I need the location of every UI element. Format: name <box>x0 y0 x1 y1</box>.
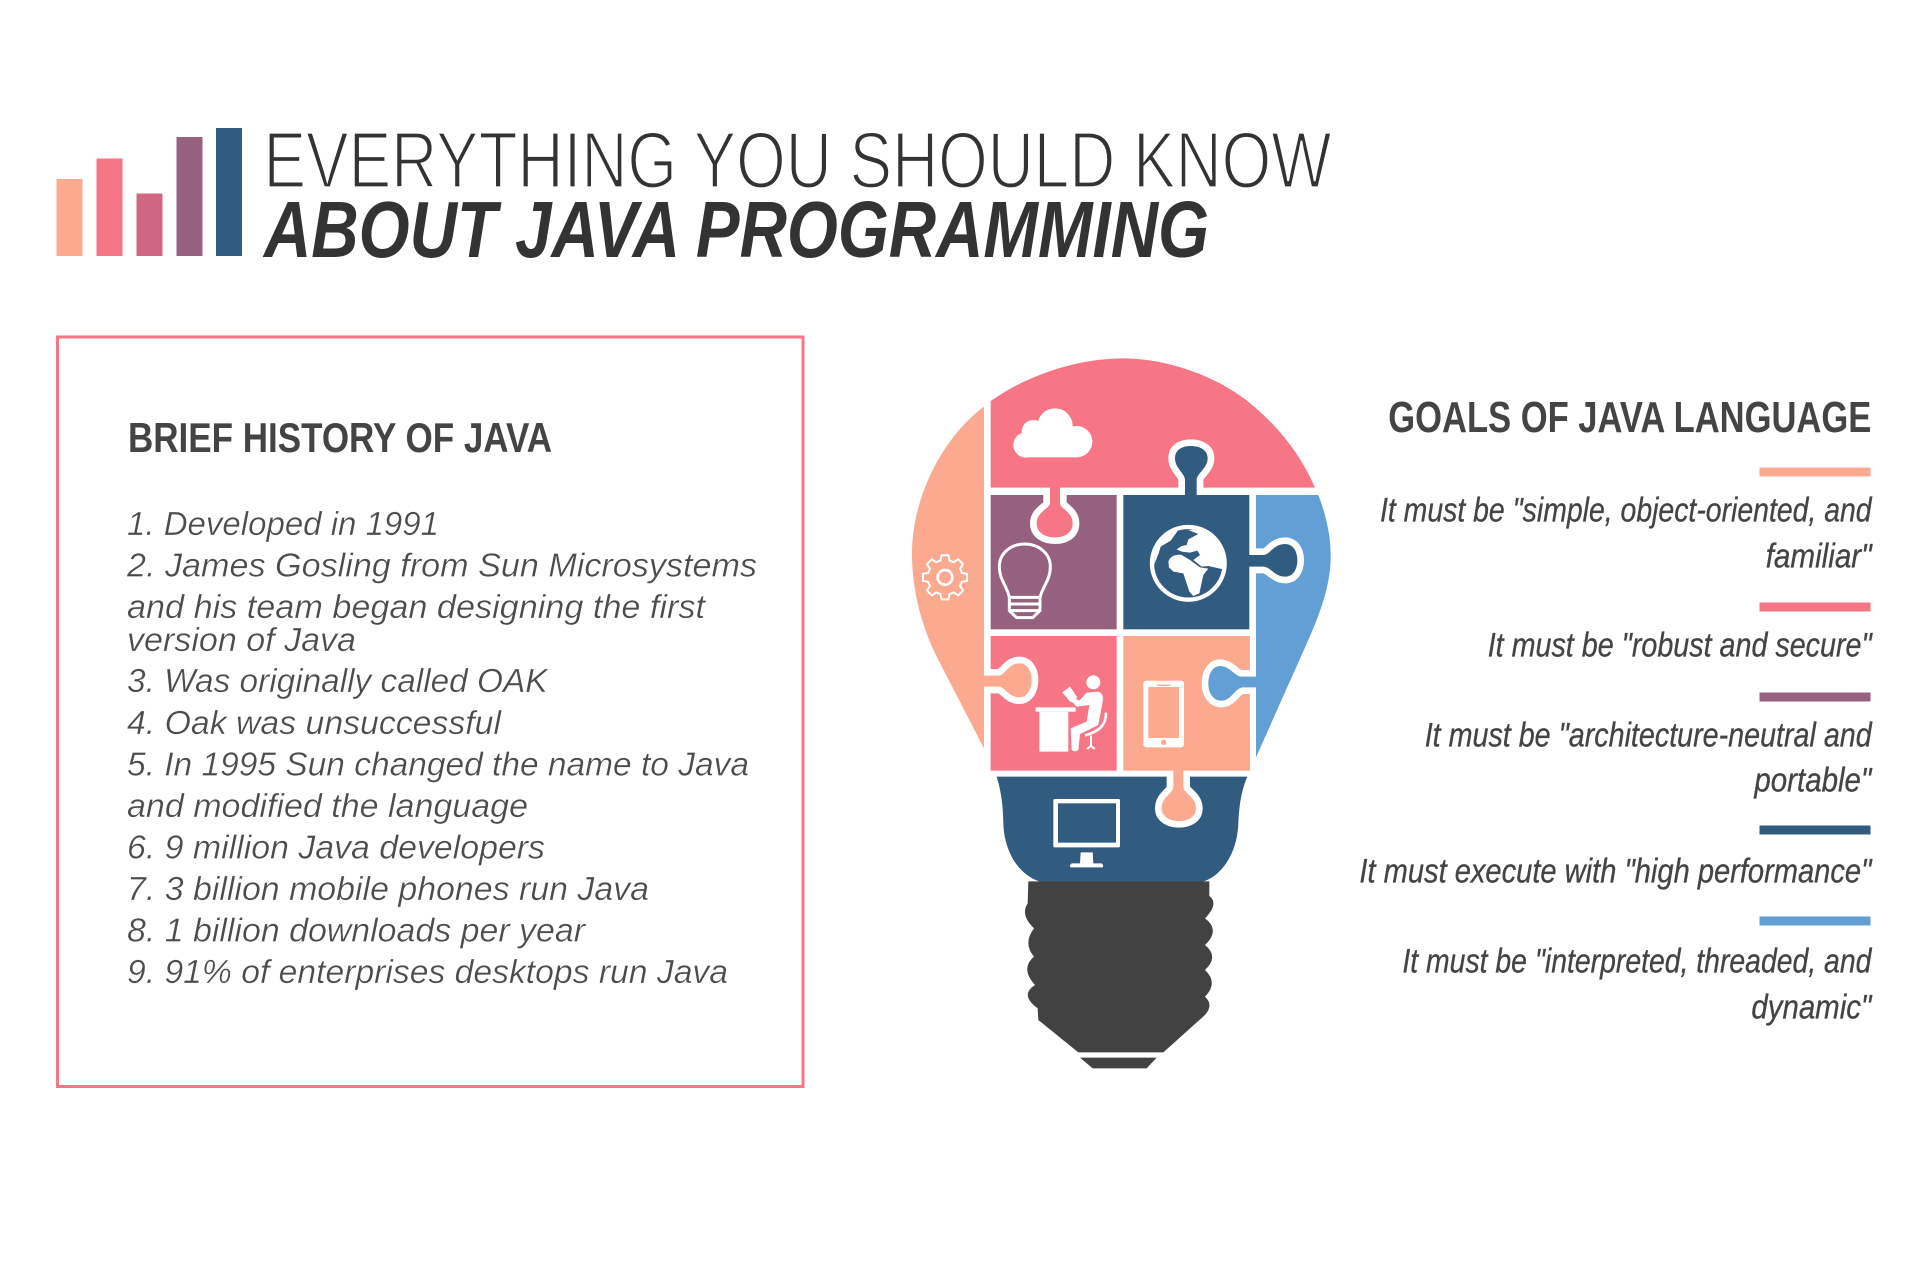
text block: history list: 5. In 1995 Sun changed the name to Java <box>127 746 749 782</box>
icon: person at desk <box>1036 675 1106 752</box>
goal: simple, object-oriented, familiar <box>1380 468 1873 576</box>
panel: brief history of Java <box>58 337 803 1086</box>
text block: history list: 6. 9 million Java developers <box>127 828 545 866</box>
piece: purple square <box>991 495 1117 629</box>
title <box>262 116 1332 274</box>
goal: high performance <box>1359 826 1873 890</box>
text block: history list: 7. 3 billion mobile phones run Java <box>127 870 649 907</box>
text block: history list: and modified the language <box>127 787 528 824</box>
icon: logo bar chart <box>56 128 242 256</box>
goal: architecture-neutral and portable: portable" <box>1754 762 1873 800</box>
text block: history list: and his team began designing the first <box>127 588 707 625</box>
icon: gear <box>923 555 967 599</box>
piece: light blue right <box>1208 495 1331 757</box>
heading: brief history: BRIEF HISTORY OF JAVA <box>128 414 552 461</box>
piece: pink top <box>991 358 1315 537</box>
text block: history list: 3. Was originally called OAK <box>127 662 550 699</box>
title: ABOUT JAVA PROGRAMMING <box>262 185 1209 274</box>
icon: cloud <box>1013 408 1092 458</box>
goal: simple, object-oriented, familiar: familiar" <box>1766 538 1873 576</box>
goal: robust and secure <box>1488 602 1873 664</box>
text block: history list: version of Java <box>127 621 356 658</box>
bulb socket <box>1025 881 1213 1068</box>
text block: history list <box>126 505 757 990</box>
chart: puzzle light bulb <box>912 358 1331 1068</box>
panel: goals of Java language <box>1359 393 1873 1026</box>
text block: history list: 1. Developed in 1991 <box>127 505 439 542</box>
icon: globe <box>1152 527 1225 600</box>
icon: smartphone <box>1143 681 1184 747</box>
text block: history list: 9. 91% of enterprises desktops run Java <box>127 953 728 990</box>
goal: interpreted, threaded, dynamic <box>1402 916 1873 1026</box>
icon: light bulb <box>999 544 1050 618</box>
piece: navy bottom <box>997 777 1247 882</box>
piece: pink square <box>991 636 1117 771</box>
piece: salmon left <box>912 407 1032 748</box>
piece: navy square <box>1123 446 1297 629</box>
goal: architecture-neutral and portable <box>1425 692 1873 800</box>
text block: history list: 8. 1 billion downloads per year <box>127 912 587 948</box>
text block: history list: 2. James Gosling from Sun Microsystems <box>126 546 757 584</box>
icon: monitor <box>1053 799 1120 867</box>
text block: history list: 4. Oak was unsuccessful <box>127 704 503 741</box>
goal: interpreted, threaded, dynamic: dynamic" <box>1751 988 1873 1026</box>
piece: salmon square <box>1123 636 1250 821</box>
title: EVERYTHING YOU SHOULD KNOW <box>264 116 1332 204</box>
